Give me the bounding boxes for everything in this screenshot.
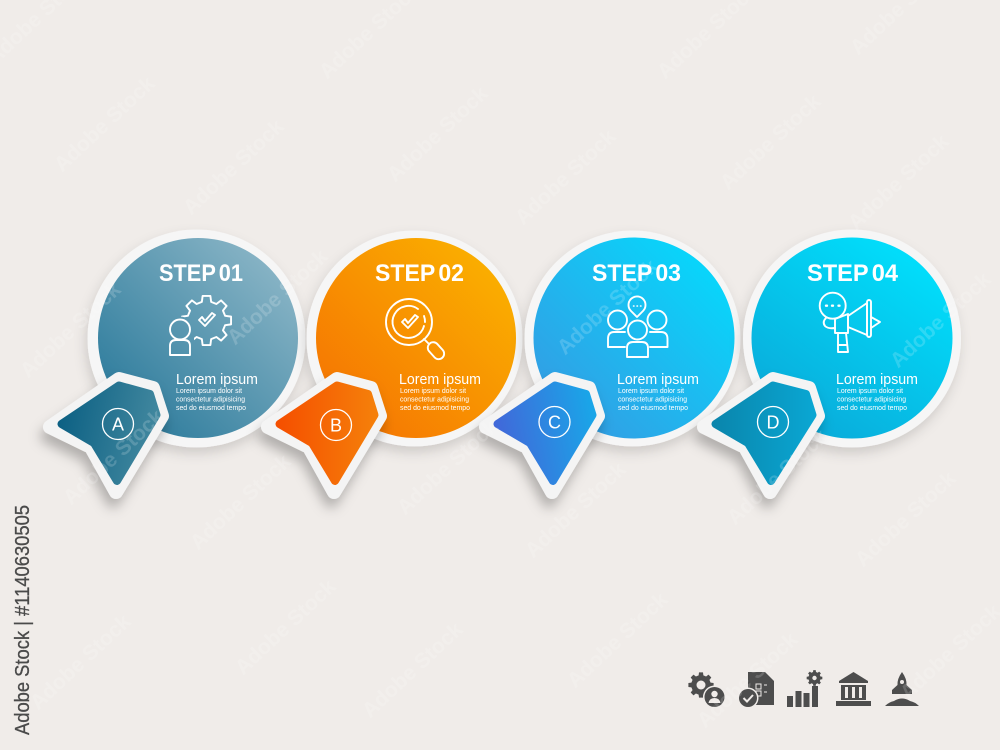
icon: document with check [738, 672, 774, 708]
watermarks: Adobe Stock [383, 82, 493, 186]
icon row: bottom right [688, 670, 919, 708]
watermarks: Adobe Stock [50, 72, 160, 176]
text block: step 03: Lorem ipsum dolor sit [618, 388, 684, 395]
watermarks: Adobe Stock [231, 575, 341, 679]
text block: step 02 [399, 372, 481, 412]
watermarks: Adobe Stock [693, 628, 803, 732]
text block: step 03: sed do eiusmod tempo [618, 405, 688, 412]
icon: bank building [836, 672, 871, 706]
heading: step 03: STEP 03 [592, 260, 681, 287]
text block: step 03: consectetur adipisicing [618, 396, 687, 404]
icon: rocket launch [885, 672, 919, 706]
watermarks: Adobe Stock [358, 618, 468, 722]
heading: step 02: STEP 02 [375, 260, 464, 287]
icon: magnifier with check [386, 299, 446, 361]
icon: person with gear and check [170, 296, 231, 355]
badge letter D: D [766, 412, 780, 432]
watermarks: Adobe Stock [59, 405, 169, 509]
watermarks: Adobe Stock [716, 90, 826, 194]
text block: step 04: consectetur adipisicing [837, 396, 906, 404]
heading: step 04: STEP 04 [807, 260, 899, 287]
text block: step 02: Lorem ipsum [399, 372, 481, 388]
panel: step 03 circle [524, 230, 740, 446]
text block: step 02: consectetur adipisicing [400, 396, 469, 404]
panel: step 01 circle [88, 230, 306, 448]
watermarks: Adobe Stock [511, 125, 621, 229]
icon: bars with gear [787, 670, 822, 707]
watermarks: Adobe Stock [26, 610, 136, 714]
text block: step 03: Lorem ipsum [617, 372, 699, 388]
watermarks: Adobe Stock [844, 130, 954, 234]
watermarks: Adobe Stock [521, 458, 631, 562]
text block: step 03 [617, 372, 699, 412]
watermarks: Adobe Stock [553, 255, 663, 359]
watermarks: Adobe Stock [186, 450, 296, 554]
text block: step 01: consectetur adipisicing [176, 396, 245, 404]
watermarks: Adobe Stock [16, 278, 126, 382]
pin D [704, 379, 818, 492]
heading: step 01: STEP 01 [159, 260, 243, 287]
vertical stock id text: Adobe Stock | #1140630505 [12, 505, 34, 735]
watermarks: Adobe Stock [393, 415, 503, 519]
watermarks: Adobe Stock [886, 268, 996, 372]
watermarks: Adobe Stock [223, 245, 333, 349]
watermarks: Adobe Stock [851, 467, 961, 571]
icon: gear with person [688, 672, 726, 708]
text block: step 01 [176, 372, 258, 412]
text block: step 02: Lorem ipsum dolor sit [400, 388, 466, 395]
pin A [50, 379, 162, 492]
text block: step 01: Lorem ipsum dolor sit [176, 388, 242, 395]
text block: step 04 [836, 372, 918, 412]
text block: step 02: sed do eiusmod tempo [400, 405, 470, 412]
badge letter C: C [548, 412, 561, 432]
pin C [486, 379, 598, 492]
pin B [268, 379, 380, 492]
icon: team with speech bubble [608, 296, 668, 357]
watermarks: Adobe Stock [723, 425, 833, 529]
badge letter A: A [112, 414, 124, 434]
text block: step 04: Lorem ipsum [836, 372, 918, 388]
panel: step 02 circle [306, 230, 522, 446]
badge letter B: B [330, 416, 342, 436]
text block: step 01: sed do eiusmod tempo [176, 405, 246, 412]
text block: step 04: sed do eiusmod tempo [837, 405, 907, 412]
text block: step 01: Lorem ipsum [176, 372, 258, 388]
watermarks: Adobe Stock [179, 115, 289, 219]
text block: step 04: Lorem ipsum dolor sit [837, 388, 903, 395]
watermarks: Adobe Stock [563, 588, 673, 692]
icon: megaphone with speech bubble [820, 293, 880, 352]
panel: step 04 circle [743, 230, 961, 448]
